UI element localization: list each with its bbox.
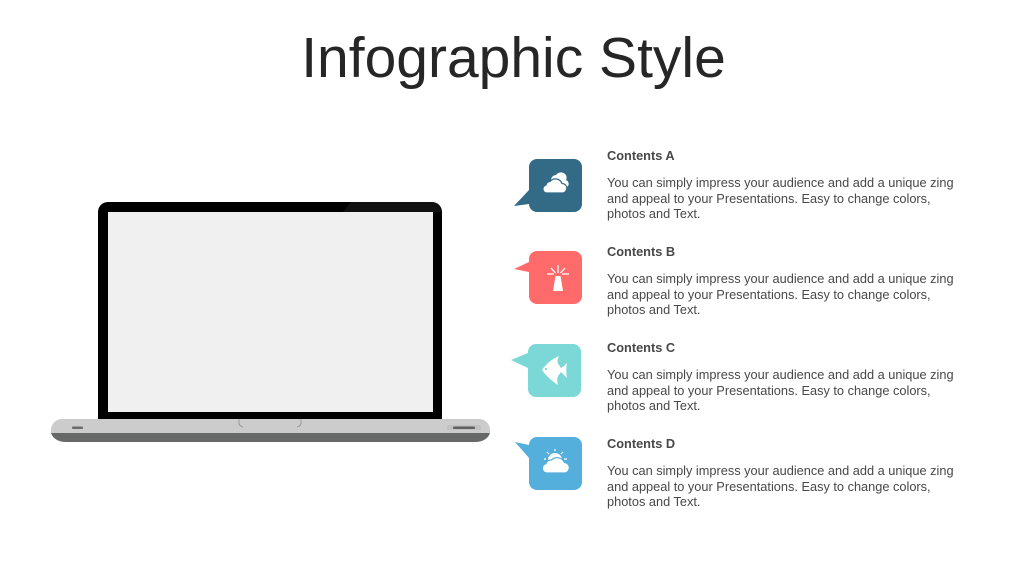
fish body [542, 356, 567, 385]
text block: Contents D [607, 436, 954, 509]
right port [447, 425, 481, 430]
trackpad notches [239, 419, 301, 427]
text block: Contents D: You can simply impress your audience and add a unique zing [607, 463, 954, 478]
text block: Contents B: Contents B [607, 244, 675, 259]
text block: Contents C: photos and Text. [607, 398, 700, 413]
text block: Contents A: and appeal to your Presentations. Easy to change colors, [607, 191, 931, 206]
sun [548, 453, 562, 467]
cloud [542, 458, 569, 473]
text block: Contents C [607, 340, 954, 413]
bezel sheen [343, 202, 441, 212]
text block: Contents A: photos and Text. [607, 206, 700, 221]
front cloud [543, 179, 567, 193]
text block: Contents C: Contents C [607, 340, 675, 355]
icon: sun and cloud bubble [515, 437, 582, 490]
text block: Contents B: photos and Text. [607, 302, 700, 317]
laptop base front [51, 433, 490, 442]
sun rays [544, 449, 567, 459]
left port [72, 426, 83, 429]
text block: Contents B [607, 244, 954, 317]
light rays [547, 265, 569, 274]
text block: Contents C: You can simply impress your audience and add a unique zing [607, 367, 954, 382]
lighthouse tower [553, 276, 563, 291]
icon: lighthouse bubble [514, 251, 582, 304]
text block: Contents D: Contents D [607, 436, 675, 451]
text block: Contents A [607, 148, 954, 221]
title: Infographic Style [301, 26, 726, 90]
text block: Contents D: photos and Text. [607, 494, 700, 509]
text block: Contents A: Contents A [607, 148, 675, 163]
text block: Contents C: and appeal to your Presentations. Easy to change colors, [607, 383, 931, 398]
laptop base top [51, 419, 490, 433]
text block: Contents B: and appeal to your Presentations. Easy to change colors, [607, 287, 931, 302]
text block: Contents A: You can simply impress your audience and add a unique zing [607, 175, 954, 190]
icon: fish bubble [511, 344, 581, 397]
icon: cloud bubble [514, 159, 582, 212]
laptop screen [108, 212, 433, 412]
text block: Contents D: and appeal to your Presentations. Easy to change colors, [607, 479, 931, 494]
text block: Contents B: You can simply impress your audience and add a unique zing [607, 271, 954, 286]
fish eye [545, 368, 547, 370]
laptop lid bezel [98, 202, 442, 419]
back cloud [551, 172, 569, 189]
